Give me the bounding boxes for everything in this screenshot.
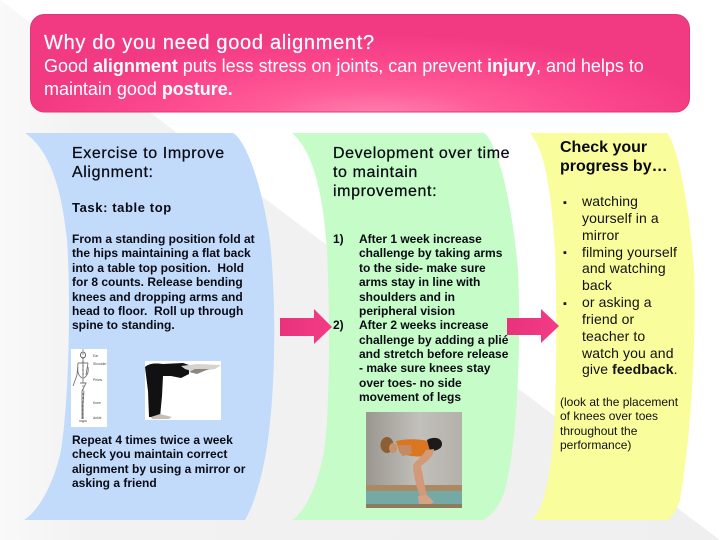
image: table top pose <box>145 361 221 420</box>
image: skeleton alignment diagram: Shoulder <box>93 362 107 366</box>
arrow: development to progress <box>507 309 559 343</box>
image: skeleton alignment diagram: Ear <box>93 354 99 358</box>
image: skeleton alignment diagram: Pelvis <box>93 378 102 382</box>
development heading <box>333 144 510 200</box>
exercise instructions: knees and dropping arms and <box>72 290 243 304</box>
closing advice: alignment by using a mirror or <box>72 462 245 476</box>
progress bullet list: or asking a <box>582 294 652 310</box>
exercise instructions: for 8 counts. Release bending <box>72 275 243 289</box>
progress bullet list: and watching <box>582 260 666 276</box>
progress bullet list: ▪ <box>563 247 567 259</box>
exercise instructions: the hips maintaining a flat back <box>72 246 251 260</box>
progress bullet list: friend or <box>582 311 634 327</box>
exercise instructions: From a standing position fold at <box>72 232 255 246</box>
step 2: over toes- no side <box>359 376 462 390</box>
progress heading: progress by… <box>560 158 668 175</box>
progress bullet list: mirror <box>582 227 619 243</box>
progress heading: Check your <box>560 138 647 156</box>
header description: maintain good posture. <box>44 78 233 98</box>
step 1: After 1 week increase <box>359 232 482 246</box>
step 2: - make sure knees stay <box>359 361 490 375</box>
progress bullet list: watch you and <box>582 345 674 361</box>
step 1: challenge by taking arms <box>359 246 502 260</box>
header description <box>44 56 644 99</box>
bullet 1 <box>563 193 659 243</box>
performance note: throughout the <box>560 424 637 438</box>
closing advice: Repeat 4 times twice a week <box>72 433 233 447</box>
exercise heading: Alignment: <box>72 164 154 180</box>
progress bullet list: teacher to <box>582 328 645 344</box>
closing advice: check you maintain correct <box>72 447 227 461</box>
image: skeleton alignment diagram <box>71 349 107 427</box>
step 1: 1) <box>333 232 344 246</box>
performance note: performance) <box>560 438 631 452</box>
step 1: peripheral vision <box>359 304 455 318</box>
progress bullet list: ▪ <box>563 298 567 310</box>
progress bullet list: back <box>582 277 612 293</box>
step 2: challenge by adding a plié <box>359 333 508 347</box>
step 1: arms stay in line with <box>359 275 480 289</box>
exercise instructions <box>72 232 255 332</box>
closing advice: asking a friend <box>72 476 157 490</box>
exercise heading: Exercise to Improve <box>72 144 225 162</box>
panel: exercise (blue) <box>24 133 274 520</box>
bullet 3 <box>563 294 678 377</box>
development heading: to maintain <box>333 164 418 180</box>
progress heading <box>560 138 668 175</box>
step 1: to the side- make sure <box>359 261 486 275</box>
progress bullet list: filming yourself <box>582 244 677 260</box>
performance note: (look at the placement <box>560 395 678 409</box>
task label: Task: table top <box>72 200 172 215</box>
progress bullet list: ▪ <box>563 196 567 208</box>
performance note: of knees over toes <box>560 409 658 423</box>
image: forward fold pose <box>366 412 462 508</box>
arrow: exercise to development <box>280 309 332 344</box>
step 1: shoulders and in <box>359 290 455 304</box>
panel: development (green) <box>292 133 519 520</box>
exercise instructions: head to floor. Roll up through <box>72 304 243 318</box>
closing advice <box>72 433 246 490</box>
progress bullet list <box>563 193 678 377</box>
header title: Why do you need good alignment? <box>44 32 375 54</box>
panel: progress (yellow) <box>530 133 694 520</box>
bullet 2 <box>563 244 677 293</box>
exercise instructions: spine to standing. <box>72 318 175 332</box>
step 2: 2) <box>333 318 344 332</box>
image: skeleton alignment diagram: Knee <box>93 401 101 405</box>
step 1 <box>333 232 502 318</box>
step 2: movement of legs <box>359 390 461 404</box>
header panel shape <box>30 14 690 112</box>
progress bullet list: give feedback. <box>582 361 678 377</box>
development steps <box>333 232 508 404</box>
development heading: improvement: <box>333 182 437 200</box>
exercise instructions: into a table top position. Hold <box>72 261 244 275</box>
progress bullet list: watching <box>582 193 638 209</box>
step 2: After 2 weeks increase <box>359 318 488 332</box>
step 2 <box>333 318 508 404</box>
progress bullet list: yourself in a <box>582 210 659 226</box>
exercise heading <box>72 144 225 181</box>
header description: Good alignment puts less stress on joints, can prevent injury, and helps to <box>44 56 644 76</box>
step 2: and stretch before release <box>359 347 508 361</box>
development heading: Development over time <box>333 144 510 162</box>
image: skeleton alignment diagram: Ankle <box>93 416 102 420</box>
performance note <box>560 395 678 452</box>
